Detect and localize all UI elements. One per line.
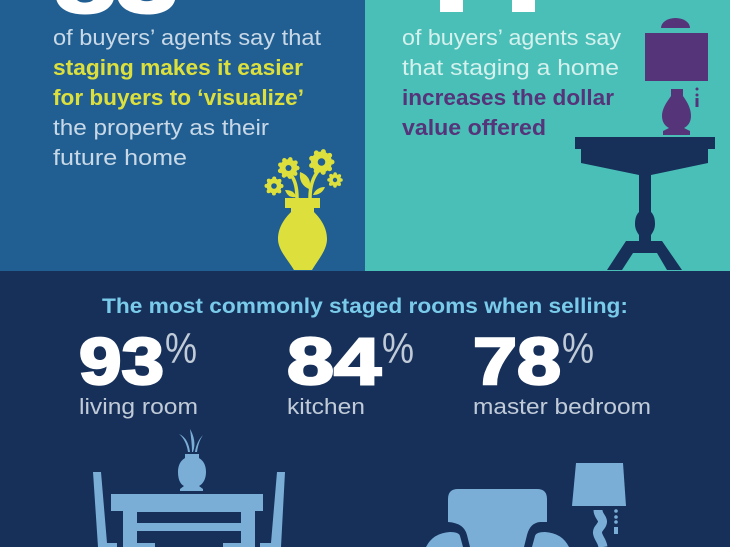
icon: navy side table: [575, 137, 715, 270]
heading: The most commonly staged rooms when selling:: [102, 295, 628, 318]
left panel text: for buyers to ‘visualize’: [53, 85, 304, 110]
stat: master bedroom 78%: [473, 324, 651, 419]
right panel text: value offered: [402, 115, 546, 140]
panel: right teal dollar value stat: [365, 0, 730, 271]
icon: purple table lamp: [645, 18, 708, 135]
stat: living room 93%: living room: [79, 394, 198, 419]
stat: master bedroom 78%: 78: [473, 324, 561, 398]
stat: kitchen 84%: 84: [287, 324, 381, 398]
stat: kitchen 84%: kitchen: [287, 394, 365, 419]
right panel text: that staging a home: [402, 55, 619, 80]
left panel text: [53, 25, 321, 170]
stat: kitchen 84%: [287, 324, 414, 419]
left panel text: future home: [53, 145, 187, 170]
panel: left blue staging stat: [0, 0, 365, 271]
icon: dining table with chairs and vase: [93, 429, 285, 547]
stat: living room 93%: %: [165, 325, 197, 373]
stat: kitchen 84%: %: [382, 325, 414, 373]
right panel text: increases the dollar: [402, 85, 614, 110]
icon: floor lamp: [572, 463, 626, 547]
left panel text: staging makes it easier: [53, 55, 303, 80]
right panel text: [402, 25, 621, 140]
icon: yellow flowers in vase: [266, 152, 341, 270]
icon: armchair: [426, 489, 569, 547]
right panel text: of buyers’ agents say: [402, 25, 621, 50]
left panel text: of buyers’ agents say that: [53, 25, 321, 50]
stat: master bedroom 78%: %: [562, 325, 594, 373]
stat: living room 93%: [79, 324, 198, 419]
stat: master bedroom 78%: master bedroom: [473, 394, 651, 419]
stat: living room 93%: 93: [79, 324, 164, 398]
left panel text: the property as their: [53, 115, 269, 140]
panel: most commonly staged rooms: [0, 271, 730, 547]
big number 44 cropped at top: [440, 0, 535, 12]
